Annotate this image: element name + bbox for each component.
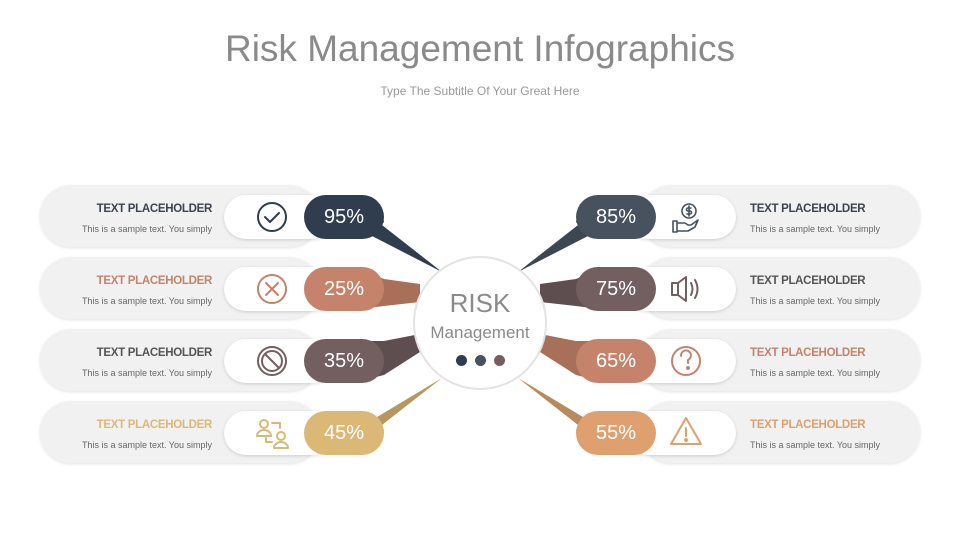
center circle: RISK [450,288,510,318]
percent badges: 35% [324,350,364,372]
text blocks: This is a sample text. You simply [82,440,212,450]
text blocks: This is a sample text. You simply [750,440,880,450]
icon: speaker [672,277,698,301]
subtitle: Type The Subtitle Of Your Great Here [380,84,580,98]
text blocks: TEXT PLACEHOLDER [97,203,212,215]
text blocks: TEXT PLACEHOLDER [97,275,212,287]
center circle: Management [430,323,530,342]
icon: check [258,203,286,231]
text blocks: TEXT PLACEHOLDER [97,419,212,431]
text blocks: This is a sample text. You simply [750,224,880,234]
percent badges: 45% [324,422,364,444]
text blocks: This is a sample text. You simply [82,368,212,378]
text blocks: TEXT PLACEHOLDER [750,347,865,359]
icon: warning [671,418,701,444]
icon: money hand [673,204,698,232]
text blocks: TEXT PLACEHOLDER [750,275,865,287]
text blocks: This is a sample text. You simply [82,224,212,234]
title: Risk Management Infographics [225,28,735,69]
percent badges: 85% [596,206,636,228]
percent badges: 95% [324,206,364,228]
percent badges: 65% [596,350,636,372]
text blocks: TEXT PLACEHOLDER [97,347,212,359]
percent badges: 25% [324,278,364,300]
percent badges: 75% [596,278,636,300]
icon: forbidden [258,347,286,375]
text blocks: TEXT PLACEHOLDER [750,419,865,431]
icon: x [258,275,286,303]
center circle [413,256,547,390]
icon: question [672,347,700,375]
icon: users swap [257,420,288,448]
text blocks: TEXT PLACEHOLDER [750,203,865,215]
text blocks: This is a sample text. You simply [750,296,880,306]
text blocks: This is a sample text. You simply [82,296,212,306]
text blocks: This is a sample text. You simply [750,368,880,378]
percent badges: 55% [596,422,636,444]
